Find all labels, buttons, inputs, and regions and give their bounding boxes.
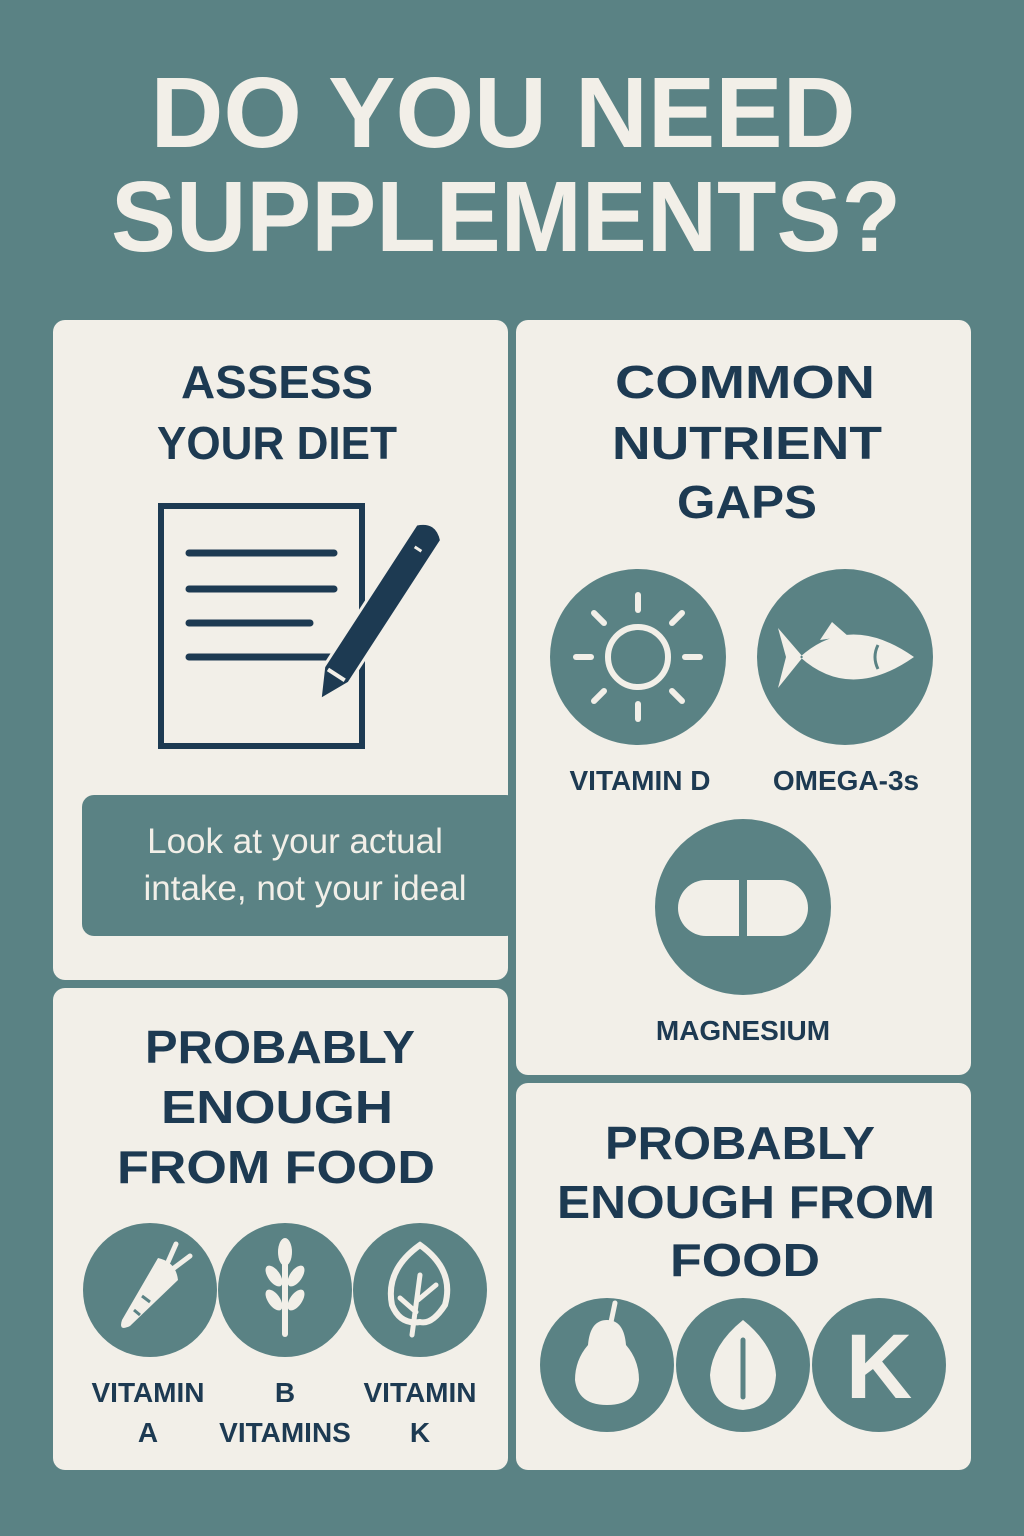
icon: sun (vitamin d) xyxy=(550,569,726,745)
icon: pear xyxy=(540,1298,674,1432)
labels: VITAMINS xyxy=(219,1417,351,1448)
panel: probably enough from food (right) xyxy=(516,1083,971,1470)
label: magnesium: MAGNESIUM xyxy=(656,1015,830,1046)
icon: letter k xyxy=(812,1298,946,1432)
label: omega-3s: OMEGA-3s xyxy=(773,765,919,796)
heading: assess your diet: YOUR DIET xyxy=(157,417,397,469)
icon: carrot xyxy=(83,1223,217,1357)
panel: assess your diet xyxy=(53,320,518,980)
panel: common nutrient gaps xyxy=(516,320,971,1075)
labels: B xyxy=(275,1377,295,1408)
labels: K xyxy=(410,1417,430,1448)
labels: VITAMIN xyxy=(363,1377,477,1408)
heading: ENOUGH FROM xyxy=(557,1176,935,1228)
heading: common nutrient gaps: COMMON xyxy=(615,356,875,408)
heading: common nutrient gaps xyxy=(612,356,882,528)
icon: document with pencil xyxy=(161,506,446,746)
heading xyxy=(117,1021,435,1193)
labels: VITAMIN xyxy=(91,1377,205,1408)
icon: drop xyxy=(676,1298,810,1432)
title xyxy=(111,57,901,273)
heading: FOOD xyxy=(670,1234,820,1286)
heading: common nutrient gaps: NUTRIENT xyxy=(612,417,882,469)
icon: leaf xyxy=(353,1223,487,1357)
labels: A xyxy=(138,1417,158,1448)
icon: letter k: K xyxy=(846,1316,912,1418)
heading: PROBABLY xyxy=(145,1021,415,1073)
labels xyxy=(91,1377,477,1448)
heading: common nutrient gaps: GAPS xyxy=(677,476,817,528)
heading xyxy=(557,1117,935,1286)
label: vitamin d: VITAMIN D xyxy=(569,765,711,796)
callout: actual intake xyxy=(82,795,518,936)
heading: assess your diet xyxy=(157,356,397,469)
heading: assess your diet: ASSESS xyxy=(181,356,373,408)
callout: actual intake: intake, not your ideal xyxy=(144,869,466,908)
panel: probably enough from food (left) xyxy=(53,988,508,1470)
icon: wheat xyxy=(218,1223,352,1357)
icon: pill (magnesium) xyxy=(655,819,831,995)
heading: FROM FOOD xyxy=(117,1141,435,1193)
heading: PROBABLY xyxy=(605,1117,875,1169)
icon: fish (omega-3s) xyxy=(757,569,933,745)
heading: ENOUGH xyxy=(161,1081,393,1133)
title: DO YOU NEED xyxy=(150,57,856,169)
callout: actual intake: Look at your actual xyxy=(147,822,443,861)
title: SUPPLEMENTS? xyxy=(111,161,901,273)
